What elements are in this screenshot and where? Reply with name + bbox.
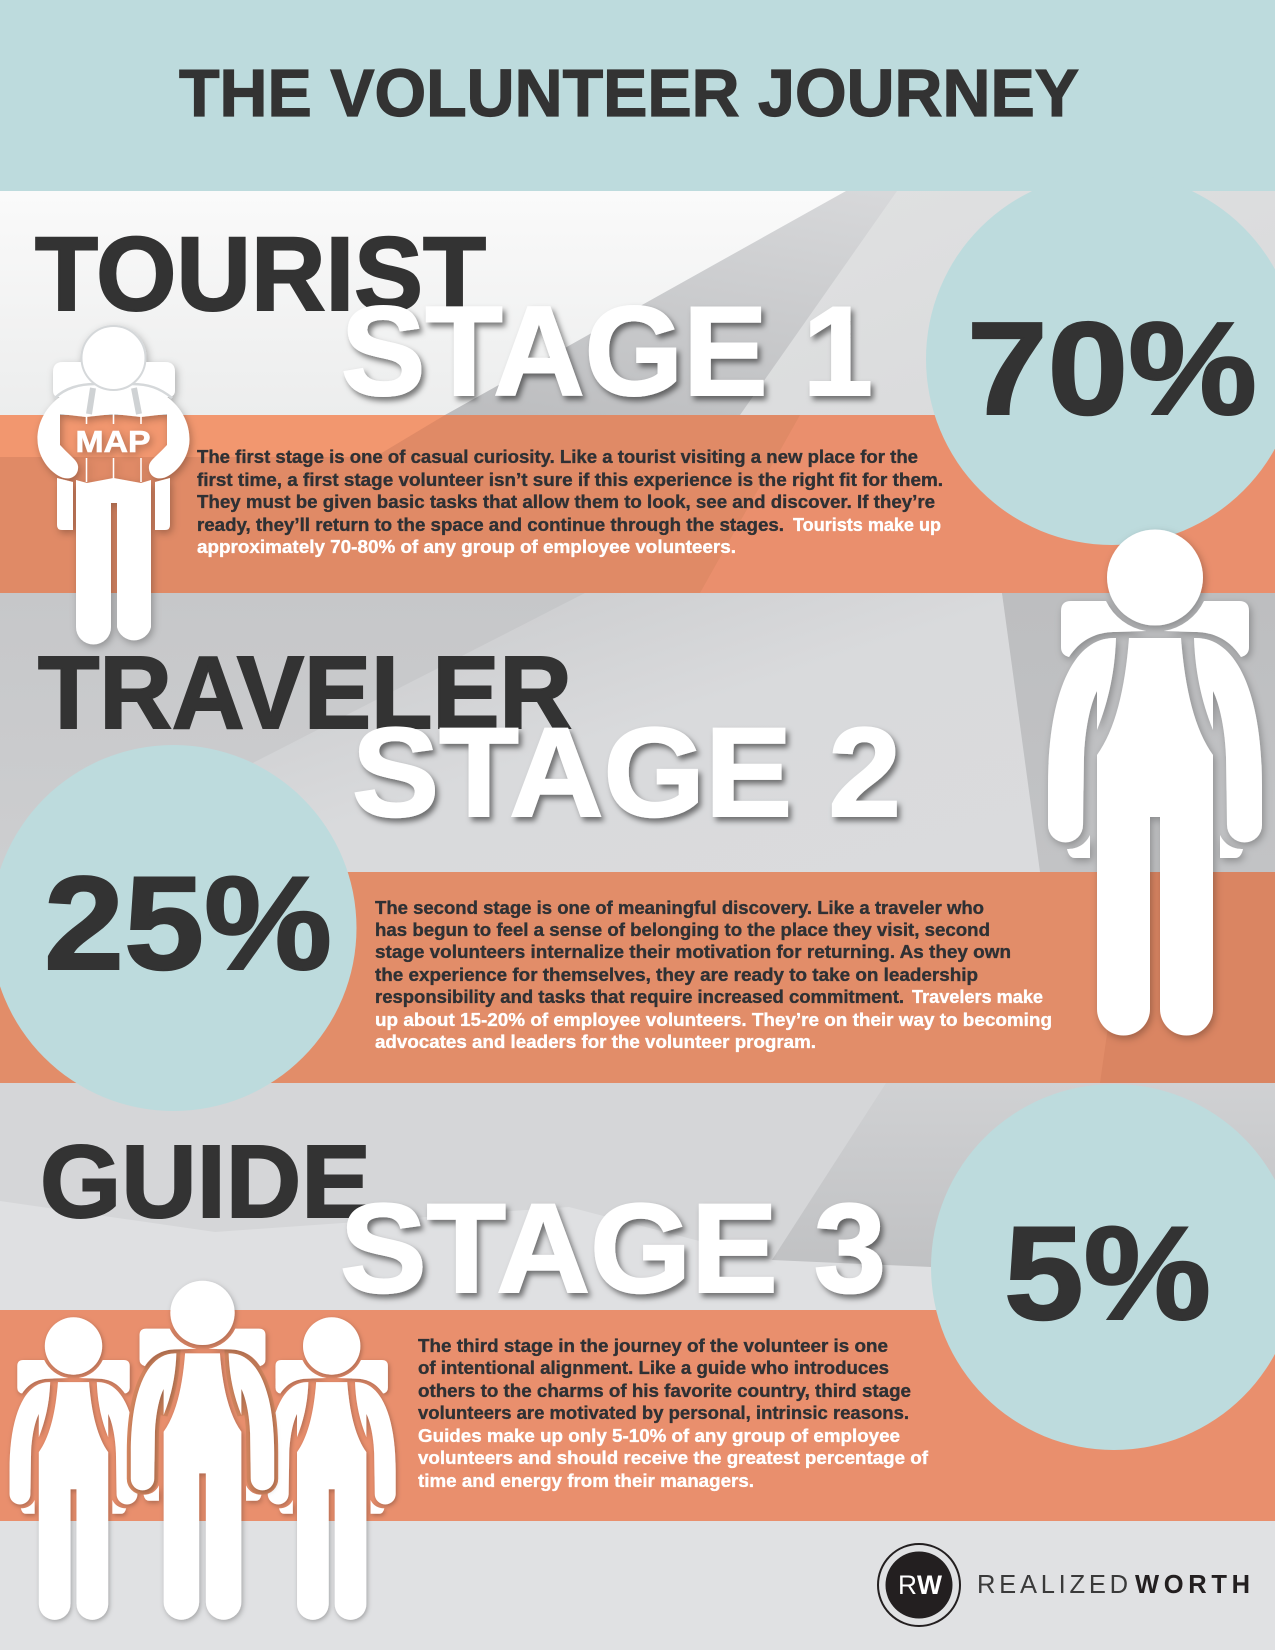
heading: guide: GUIDE xyxy=(40,1124,371,1239)
circle: 5% xyxy=(931,1084,1275,1450)
text block: stage 3: volunteers and should receive the greatest percentage of xyxy=(418,1448,929,1468)
circle: 70%: 70% xyxy=(967,295,1257,442)
background: section 3 xyxy=(0,1083,1275,1650)
logo: realizedworth: R xyxy=(898,1570,917,1600)
text block: stage 1: They must be given basic tasks that allow them to look, see and discover. If they’re xyxy=(197,492,935,512)
text block: stage 3: others to the charms of his favorite country, third stage xyxy=(418,1381,911,1401)
heading: stage 1: STAGE 1 xyxy=(341,280,873,422)
heading: stage 2: STAGE 2 xyxy=(352,701,901,843)
icon: right guide xyxy=(268,1317,396,1620)
text block: stage 3: time and energy from their managers. xyxy=(418,1471,754,1491)
logo: realizedworth xyxy=(878,1544,1250,1626)
text block: stage 3: Guides make up only 5-10% of any group of employee xyxy=(418,1426,900,1446)
text block: stage 3: of intentional alignment. Like a guide who introduces xyxy=(418,1358,889,1378)
text block: stage 1: approximately 70-80% of any group of employee volunteers. xyxy=(197,537,736,557)
text block: stage 1: The first stage is one of casual curiosity. Like a tourist visiting a new place for the xyxy=(197,447,918,467)
icon: centre guide xyxy=(131,1281,274,1620)
text block: stage 2: the experience for themselves, they are ready to take on leadership xyxy=(375,965,978,985)
title: THE VOLUNTEER JOURNEY xyxy=(179,56,1079,131)
background: section 1 xyxy=(0,191,1275,415)
circle: 5%: 5% xyxy=(1004,1200,1211,1348)
text block: stage 1: first time, a first stage volunteer isn’t sure if this experience is the right fit for them. xyxy=(197,470,943,490)
icon: tourist with map: MAP xyxy=(76,424,150,459)
orange band 1 xyxy=(0,415,1275,593)
heading: stage 3: STAGE 3 xyxy=(340,1177,886,1319)
text block: stage 2: has begun to feel a sense of belonging to the place they visit, second xyxy=(375,920,990,940)
text block: stage 2: responsibility and tasks that require increased commitment. xyxy=(375,987,904,1007)
icon: left guide xyxy=(10,1317,137,1620)
orange band 2 xyxy=(0,872,1275,1083)
text block: stage 3 xyxy=(418,1336,929,1491)
logo: realizedworth: WORTH xyxy=(1135,1571,1250,1599)
text block: stage 1: Tourists make up xyxy=(793,515,941,535)
logo: realizedworth: W xyxy=(917,1570,943,1600)
text block: stage 1 xyxy=(197,447,943,557)
text block: stage 2 xyxy=(375,898,1052,1052)
text block: stage 3: volunteers are motivated by personal, intrinsic reasons. xyxy=(418,1403,909,1423)
circle: 70% xyxy=(926,173,1275,545)
text block: stage 2: Travelers make xyxy=(912,987,1043,1007)
text block: stage 2: The second stage is one of meaningful discovery. Like a traveler who xyxy=(375,898,984,918)
text block: stage 3: The third stage in the journey of the volunteer is one xyxy=(418,1336,888,1356)
text block: stage 1: ready, they’ll return to the space and continue through the stages. xyxy=(197,515,784,535)
heading: tourist: TOURIST xyxy=(35,216,486,333)
icon: tourist with map xyxy=(37,326,190,644)
circle: 25% xyxy=(0,745,356,1111)
text block: stage 2: advocates and leaders for the volunteer program. xyxy=(375,1032,816,1052)
orange band 3 xyxy=(0,1310,1275,1521)
icon: group of three guides xyxy=(10,1281,396,1620)
background: section 2 xyxy=(0,593,1275,872)
heading: traveler: TRAVELER xyxy=(38,635,572,750)
logo: realizedworth: REALIZED xyxy=(977,1571,1128,1599)
circle: 25%: 25% xyxy=(44,850,332,998)
header background xyxy=(0,0,1275,191)
text block: stage 2: up about 15-20% of employee volunteers. They’re on their way to becoming xyxy=(375,1010,1052,1030)
text block: stage 2: stage volunteers internalize their motivation for returning. As they own xyxy=(375,942,1011,962)
icon: traveler with backpack xyxy=(1048,530,1262,1036)
